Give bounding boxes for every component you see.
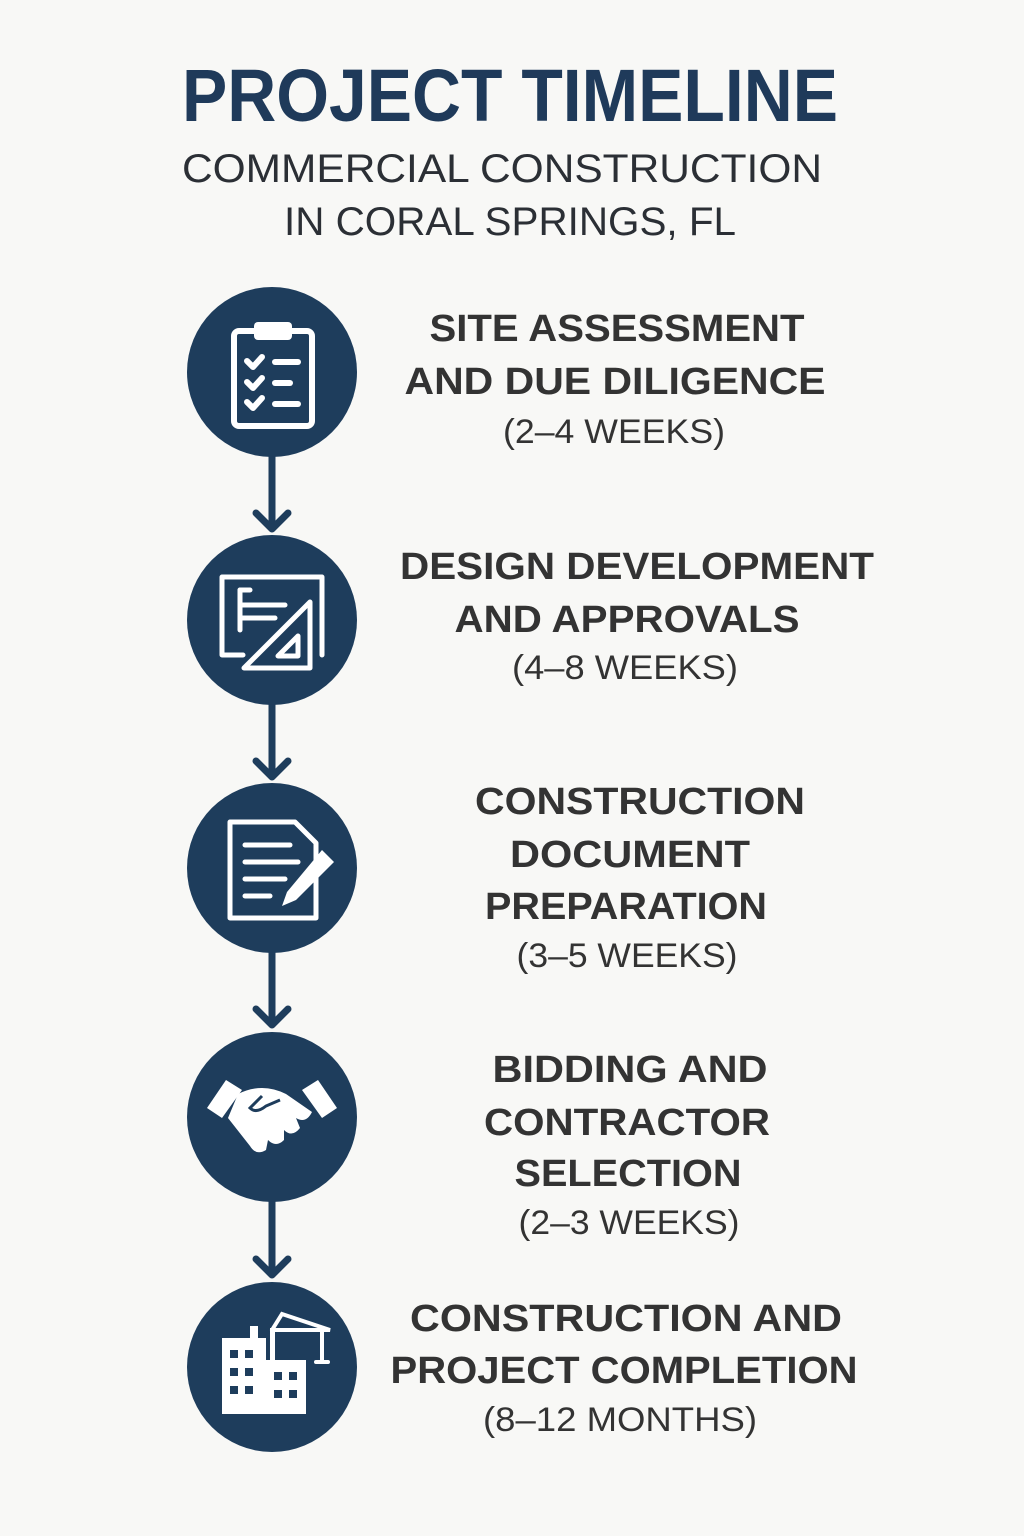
icon: handshake [187, 1032, 357, 1202]
step 2 text: (4–8 WEEKS) [512, 649, 738, 687]
step 2 text: AND APPROVALS [454, 599, 800, 641]
step 1 text [404, 308, 826, 451]
step 5 text: (8–12 MONTHS) [483, 1401, 757, 1439]
step 5 text: CONSTRUCTION AND [410, 1298, 842, 1340]
step 3 text: (3–5 WEEKS) [516, 937, 738, 975]
step 5 text: PROJECT COMPLETION [390, 1350, 858, 1392]
step 5 text [390, 1298, 858, 1439]
step 4 text: SELECTION [514, 1153, 742, 1195]
step 1 text: AND DUE DILIGENCE [404, 361, 826, 403]
icon: document with pen [187, 783, 357, 953]
subtitle [182, 147, 822, 244]
step 3 text [475, 781, 805, 975]
subtitle: COMMERCIAL CONSTRUCTION [182, 147, 822, 191]
step 3 text: PREPARATION [485, 886, 767, 928]
step 2 text [400, 546, 874, 687]
step 1 text: (2–4 WEEKS) [503, 413, 725, 451]
icon: clipboard [187, 287, 357, 457]
step 1 text: SITE ASSESSMENT [430, 308, 804, 350]
arrows [256, 455, 288, 1275]
step 2 text: DESIGN DEVELOPMENT [400, 546, 874, 588]
step 4 text: BIDDING AND [492, 1049, 768, 1091]
step 3 text: CONSTRUCTION [475, 781, 805, 823]
step 3 text: DOCUMENT [510, 834, 750, 876]
step 4 text: CONTRACTOR [484, 1102, 770, 1144]
step 4 text: (2–3 WEEKS) [518, 1204, 740, 1242]
step 4 text [484, 1049, 770, 1242]
title: PROJECT TIMELINE [182, 54, 838, 137]
icon: building and crane [187, 1282, 357, 1452]
icon: blueprint [187, 535, 357, 705]
subtitle: IN CORAL SPRINGS, FL [284, 200, 736, 244]
